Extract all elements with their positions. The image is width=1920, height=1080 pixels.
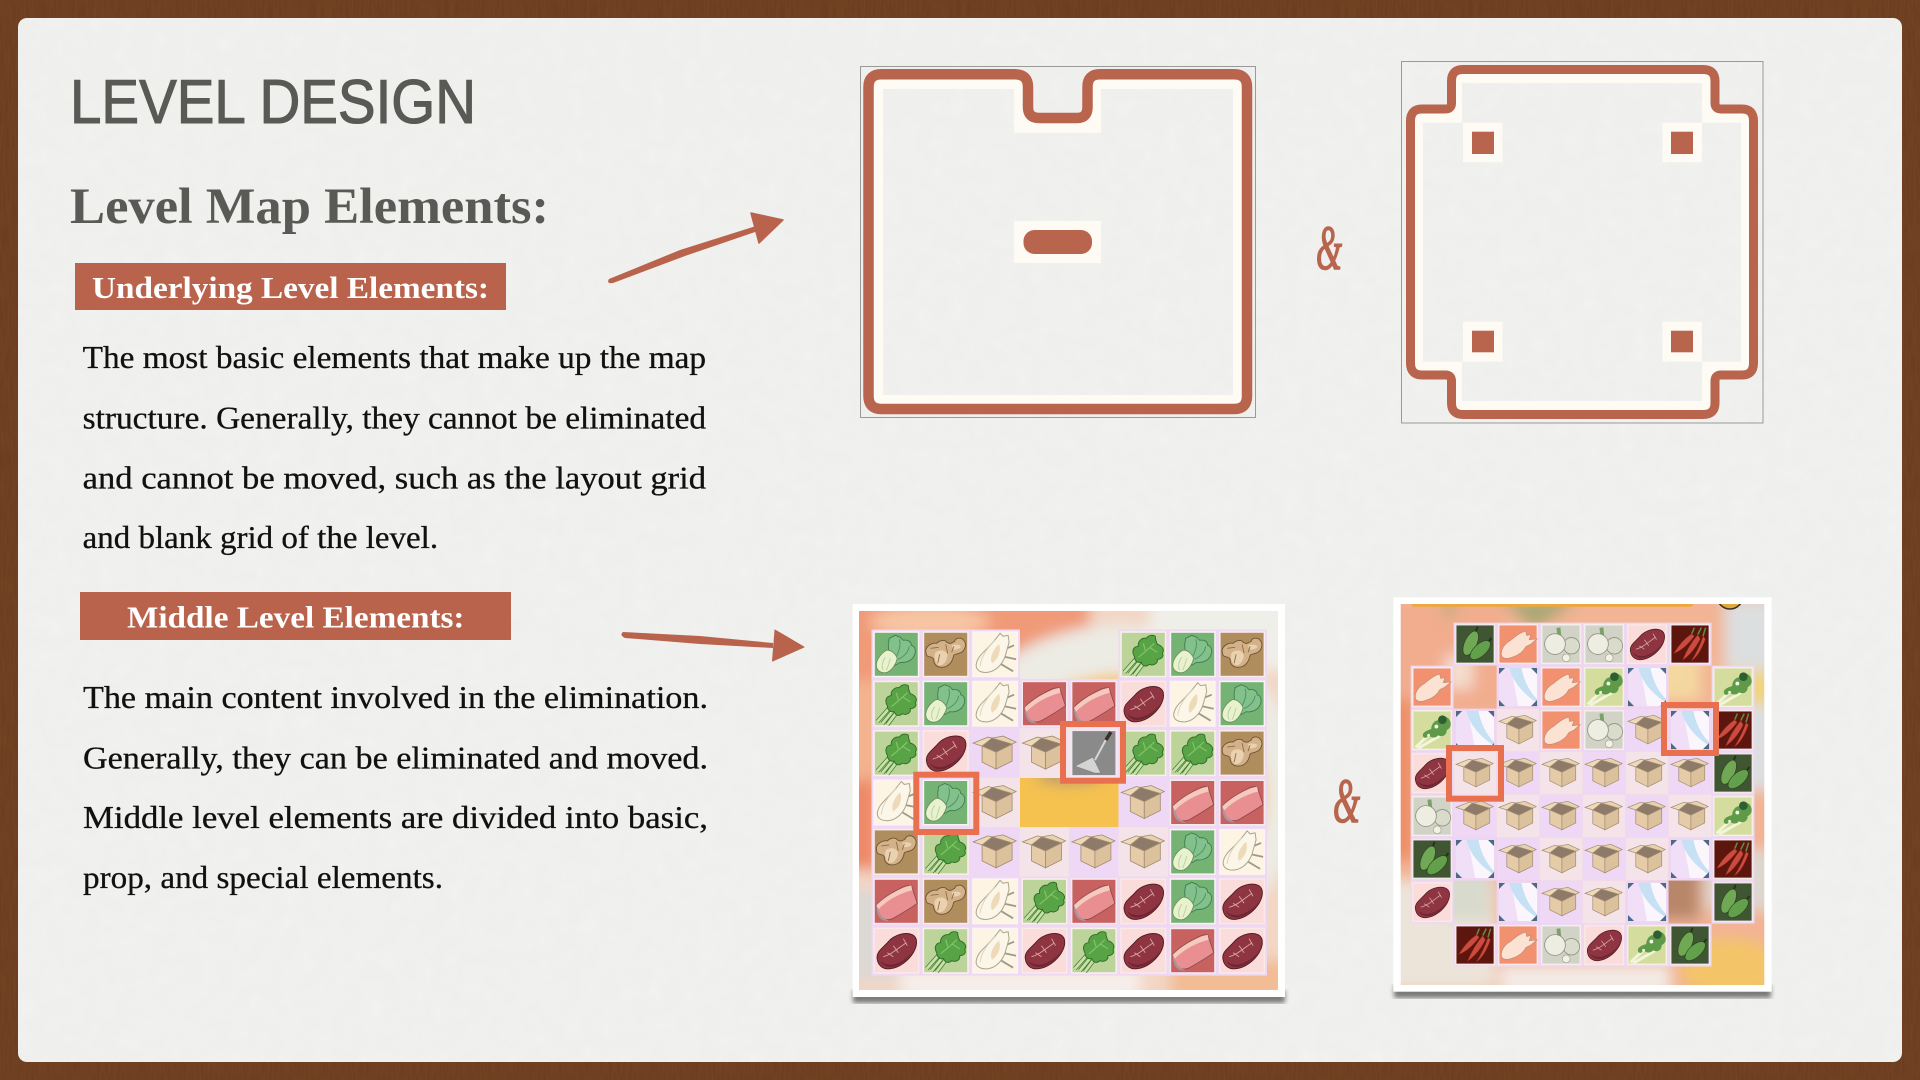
- arrow: to underlying maps: [608, 213, 783, 283]
- text block: middle description: [83, 679, 708, 895]
- ampersand: top: &: [1316, 215, 1342, 283]
- tile row 2: [1411, 666, 1755, 709]
- text block: middle description: The main content involved in the elimination.: [83, 679, 708, 715]
- text block: middle description: Middle level elements are divided into basic,: [83, 799, 708, 835]
- highlight: box tile: [1449, 748, 1501, 799]
- tile row 3: [872, 728, 1267, 778]
- tile row 7: [872, 926, 1267, 976]
- title: LEVEL DESIGN: [70, 68, 476, 137]
- text block: underlying description: and blank grid of the level.: [83, 519, 438, 555]
- tile row 5: [1411, 795, 1755, 838]
- tile row 6: [1411, 838, 1755, 881]
- top progress bar: [1412, 604, 1693, 607]
- card frame: [1393, 597, 1772, 992]
- tile row 4: [1411, 752, 1755, 795]
- game board: left: [850, 604, 1288, 1004]
- heading: level map elements: Level Map Elements:: [70, 179, 549, 235]
- tile row 2: [872, 679, 1267, 729]
- tile row 8: [1454, 924, 1712, 967]
- card frame: [853, 604, 1285, 997]
- text block: middle description: Generally, they can be eliminated and moved.: [83, 740, 708, 776]
- text block: underlying description: and cannot be moved, such as the layout grid: [83, 460, 706, 496]
- arrow: to middle boards: [621, 630, 804, 661]
- card shadow: [1394, 985, 1771, 998]
- text block: middle description: prop, and special elements.: [83, 859, 443, 895]
- card shadow: [853, 990, 1285, 1003]
- tile row 7: [1411, 881, 1755, 924]
- tile row 5: [872, 827, 1267, 877]
- badge: middle level elements: Middle Level Elements:: [127, 600, 464, 634]
- badge: underlying level elements: Underlying Level Elements:: [92, 270, 489, 305]
- badge: middle level elements: [80, 592, 511, 640]
- game board: right: [1385, 583, 1780, 1000]
- tile row 6: [872, 876, 1267, 926]
- highlight: bok choy tile: [916, 775, 976, 832]
- blurred food background: [1400, 604, 1764, 985]
- tile row 1: [872, 630, 1267, 679]
- text block: underlying description: The most basic elements that make up the map: [83, 339, 706, 375]
- tile row 3: [1411, 709, 1755, 752]
- map: notch and pill layout: [860, 66, 1256, 418]
- tile row 1: [1454, 623, 1712, 666]
- tiles: [1411, 623, 1755, 967]
- tiles: [872, 630, 1267, 976]
- text block: underlying description: structure. Generally, they cannot be eliminated: [83, 400, 706, 436]
- tile row 4: [872, 778, 1267, 827]
- text block: underlying description: [83, 339, 706, 555]
- highlight: spatula tile: [1063, 724, 1123, 781]
- highlight: ice tile: [1664, 705, 1716, 753]
- map: cross layout with four blocks: [1402, 62, 1763, 423]
- ampersand: bottom: &: [1333, 768, 1360, 836]
- blurred food background: [859, 611, 1278, 990]
- badge: underlying level elements: [75, 263, 506, 310]
